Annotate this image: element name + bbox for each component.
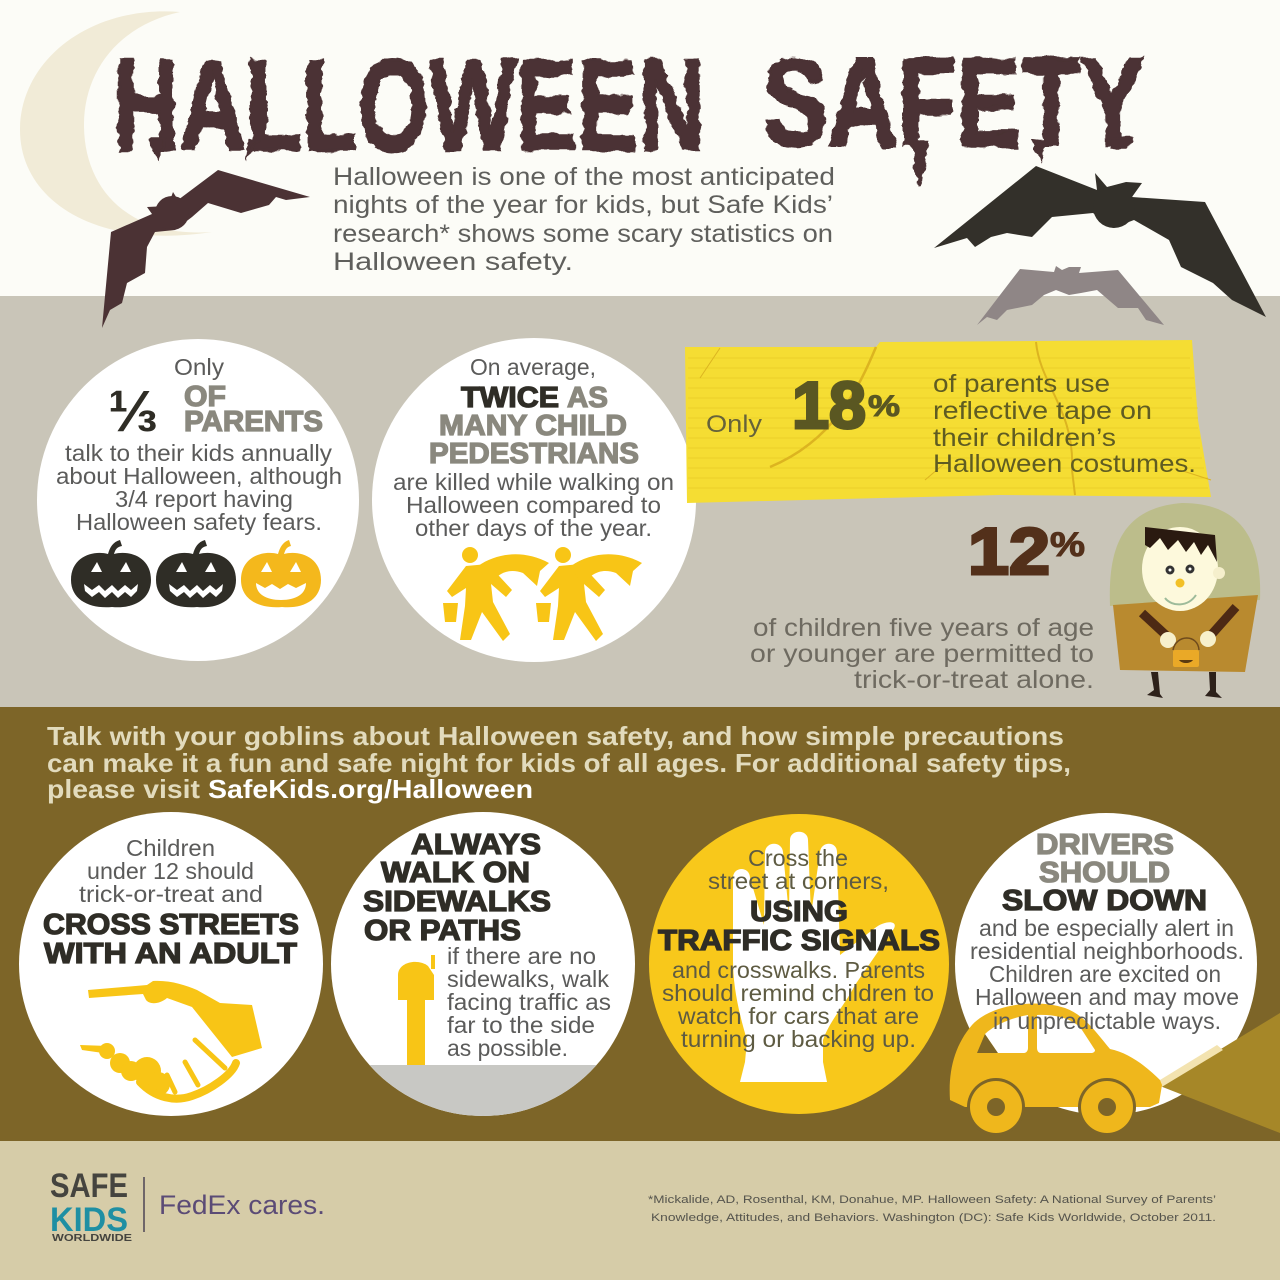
stat: 12 percent: % <box>1050 526 1085 564</box>
stat: 12 percent: 12 <box>968 514 1050 588</box>
heading: twice as many child pedestrians: AS <box>567 382 608 414</box>
icon: yellow car <box>950 1003 1162 1136</box>
text: children under 12 <box>79 835 263 907</box>
heading: drivers should slow down: SLOW DOWN <box>1002 885 1207 917</box>
text: cross the street at corners <box>708 845 889 894</box>
heading: of parents <box>184 381 323 438</box>
text: only: Only <box>174 354 225 380</box>
heading: always walk on sidewalks or paths: SIDEWALKS <box>363 886 551 918</box>
text: and crosswalks: and crosswalks. Parents <box>672 957 925 983</box>
intro text: nights of the year for kids, but Safe Kids’ <box>333 191 833 219</box>
text: be especially alert: Halloween and may move <box>975 984 1239 1010</box>
text: of parents use reflective tape: their children’s <box>933 424 1116 452</box>
text: children five years or younger <box>750 614 1094 694</box>
text: talk with your goblins: please visit <box>47 774 200 804</box>
intro text <box>333 163 835 276</box>
logo: Safe Kids Worldwide <box>50 1167 132 1244</box>
panel: cross streets with an adult <box>19 812 323 1116</box>
heading: always walk on sidewalks or paths: ALWAYS <box>411 829 541 861</box>
icon: walking child 1 <box>443 547 549 641</box>
heading: cross streets with an adult: WITH AN ADULT <box>44 938 297 970</box>
heading: cross streets with an adult: CROSS STREETS <box>43 909 299 941</box>
text: description <box>56 440 342 535</box>
text: if there are no sidewalks: as possible. <box>447 1035 568 1061</box>
middle statistics panel background <box>0 296 1280 707</box>
text: description: talk to their kids annually <box>65 440 333 466</box>
text: description: other days of the year. <box>415 515 652 541</box>
footnote <box>648 1194 1216 1224</box>
title: SAFETY <box>763 32 1145 173</box>
text: talk with your goblins <box>47 721 1071 804</box>
heading: using traffic signals <box>658 896 940 957</box>
text: if there are no sidewalks: if there are no <box>447 943 596 969</box>
tips panel background <box>0 707 1280 1141</box>
heading: always walk on sidewalks or paths <box>363 829 551 947</box>
panel: one third of parents <box>37 339 359 661</box>
heading: drivers should slow down: SHOULD <box>1039 857 1170 889</box>
stat: one third: ⅓ <box>108 379 158 444</box>
icon: black pumpkin 2 <box>156 540 236 607</box>
icon: crescent moon <box>20 11 212 236</box>
text: if there are no sidewalks <box>447 943 611 1061</box>
text: if there are no sidewalks: facing traffic as <box>447 989 611 1015</box>
heading: twice as many child pedestrians: PEDESTRIANS <box>429 438 639 470</box>
text: children under 12: Children <box>126 835 215 861</box>
icon: white hand <box>733 832 895 1082</box>
heading: drivers should slow down: DRIVERS <box>1036 829 1174 861</box>
heading: always walk on sidewalks or paths: OR PATHS <box>364 915 521 947</box>
text: children five years or younger: or younger are permitted to <box>750 640 1094 668</box>
heading: using traffic signals: USING <box>750 896 848 928</box>
text: of parents use reflective tape: reflective tape on <box>933 397 1152 425</box>
text: children under 12: trick-or-treat and <box>79 881 263 907</box>
heading: twice as many child pedestrians: TWICE <box>461 382 559 414</box>
icon: headlight beam <box>1160 1013 1280 1133</box>
heading: using traffic signals: TRAFFIC SIGNALS <box>658 925 940 957</box>
icon: yellow pumpkin <box>241 540 321 607</box>
sidewalk <box>370 1065 596 1116</box>
intro text: Halloween safety. <box>333 248 573 276</box>
footnote: *Mickalide, AD, Rosenthal, KM, Donahue, MP. Halloween Safety: A National Survey of Parents’ <box>648 1194 1216 1206</box>
text: and crosswalks <box>662 957 934 1052</box>
footnote: Knowledge, Attitudes, and Behaviors. Washington (DC): Safe Kids Worldwide, October 2011. <box>651 1212 1216 1224</box>
intro text: Halloween is one of the most anticipated <box>333 163 835 191</box>
header background <box>0 0 1280 296</box>
text: and crosswalks: should remind children to <box>662 980 934 1006</box>
text: if there are no sidewalks: far to the side <box>447 1012 595 1038</box>
text: be especially alert: Children are excited on <box>989 961 1221 987</box>
heading: of parents: OF <box>184 381 226 413</box>
panel: reflective tape statistic <box>685 340 1211 503</box>
text: be especially alert: residential neighborhoods. <box>970 938 1244 964</box>
stat: 12 percent <box>968 514 1085 588</box>
text: children five years or younger: trick-or-treat alone. <box>854 666 1094 694</box>
logo: Safe Kids Worldwide: KIDS <box>50 1201 128 1239</box>
logo: FedEx cares: FedEx cares. <box>159 1190 325 1220</box>
text: be especially alert <box>970 915 1244 1034</box>
panel: traffic signals <box>649 814 949 1114</box>
stat: 18 percent: 18 <box>792 368 866 442</box>
panel: drivers should slow down <box>950 813 1280 1136</box>
heading: cross streets with an adult <box>43 909 299 970</box>
icon: right bat <box>934 166 1266 317</box>
icon: child in costume <box>1110 503 1260 698</box>
icon: left bat <box>102 170 310 328</box>
heading: drivers should slow down <box>1002 829 1207 917</box>
stat: 18 percent <box>792 368 900 442</box>
text: be especially alert: and be especially alert in <box>979 915 1234 941</box>
heading: always walk on sidewalks or paths: WALK ON <box>381 857 530 889</box>
text: description: 3/4 report having <box>115 486 293 512</box>
text: talk with your goblins: can make it a fun and safe night for kids of all ages. For additional safety tips, <box>47 748 1071 778</box>
heading: twice as many child pedestrians: MANY CHILD <box>439 410 627 442</box>
intro text: research* shows some scary statistics on <box>333 220 833 248</box>
text: children five years or younger: of children five years of age <box>753 614 1094 642</box>
text: be especially alert: in unpredictable ways. <box>993 1008 1221 1034</box>
panel: twice as many child pedestrians <box>372 338 696 662</box>
text: children under 12: under 12 should <box>87 858 254 884</box>
icon: mailbox <box>398 955 435 1065</box>
icon: handshake <box>80 981 262 1099</box>
divider <box>143 1177 145 1232</box>
text: talk with your goblins: SafeKids.org/Halloween <box>208 774 533 804</box>
text: cross the street at corners: street at corners, <box>708 868 889 894</box>
text: description <box>393 469 674 541</box>
footer panel background <box>0 1141 1280 1280</box>
text: of parents use reflective tape: Halloween costumes. <box>933 450 1196 478</box>
text: cross the street at corners: Cross the <box>748 845 848 871</box>
text: if there are no sidewalks: sidewalks, walk <box>447 966 610 992</box>
text: and crosswalks: watch for cars that are <box>677 1003 919 1029</box>
text: of parents use reflective tape <box>933 370 1196 478</box>
logo: Safe Kids Worldwide: WORLDWIDE <box>52 1233 132 1244</box>
logo: Safe Kids Worldwide: SAFE <box>50 1167 128 1205</box>
heading: twice as many child pedestrians <box>429 382 639 470</box>
icon: grey bat <box>977 266 1164 325</box>
text: description: are killed while walking on <box>393 469 674 495</box>
panel: always walk on sidewalks <box>330 812 640 1120</box>
text: description: about Halloween, although <box>56 463 342 489</box>
text: and crosswalks: turning or backing up. <box>681 1026 916 1052</box>
text: description: Halloween compared to <box>406 492 661 518</box>
text: talk with your goblins: Talk with your goblins about Halloween safety, and how simple precautions <box>47 721 1064 751</box>
stat: 18 percent: % <box>868 390 900 423</box>
text: only: Only <box>706 411 762 438</box>
title: HALLOWEEN <box>113 32 705 178</box>
icon: walking child 2 <box>536 547 642 641</box>
text: description: Halloween safety fears. <box>76 509 322 535</box>
text: of parents use reflective tape: of parents use <box>933 370 1110 398</box>
heading: of parents: PARENTS <box>184 406 323 438</box>
text: on average: On average, <box>470 354 596 380</box>
headlight glow on circle <box>1160 1045 1223 1088</box>
icon: black pumpkin 1 <box>71 540 151 607</box>
